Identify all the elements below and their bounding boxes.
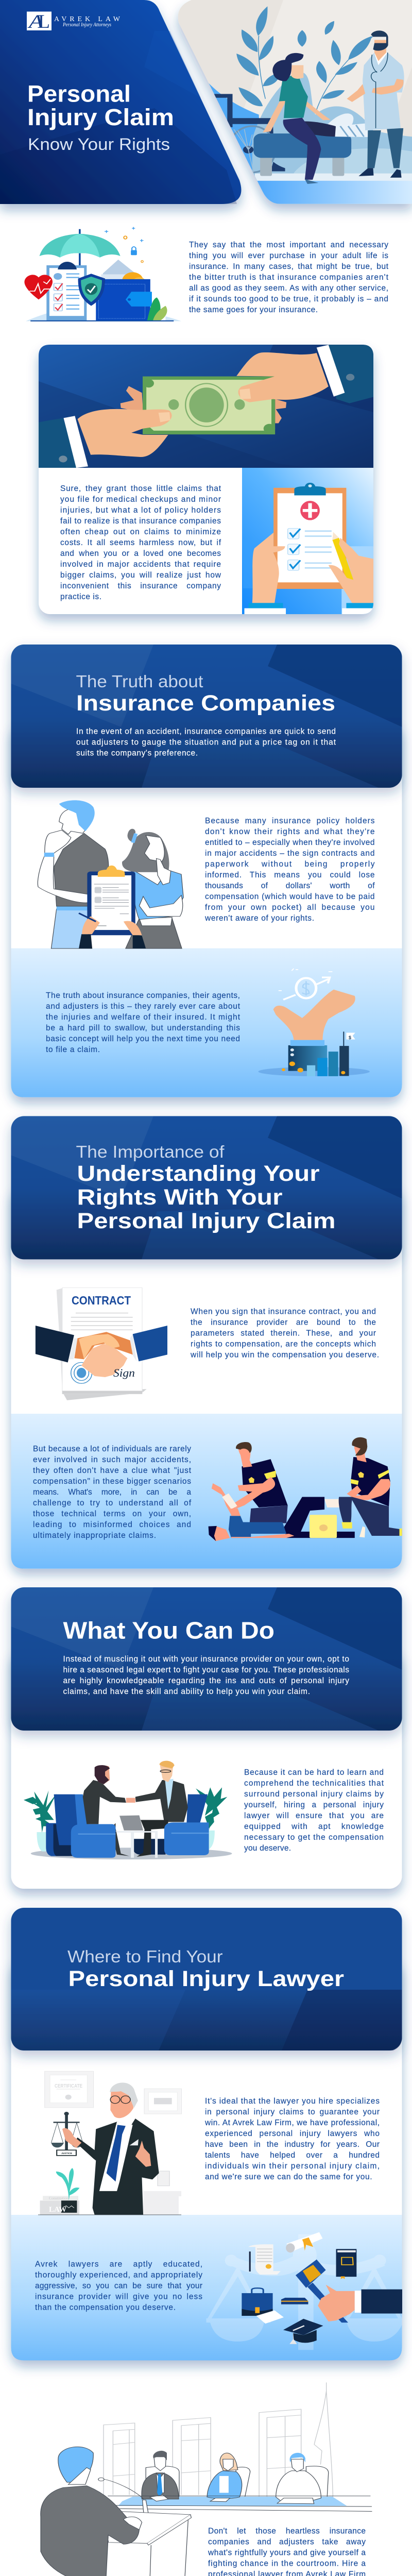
text block bbox=[204, 2097, 380, 2181]
illustration: paramedics treating a patient bbox=[209, 1437, 402, 1541]
text block: rights to compensation, are the concepts which bbox=[191, 1340, 376, 1349]
hero left panel bbox=[0, 0, 241, 204]
section header: What You Can Do bbox=[63, 1617, 274, 1643]
text block on light panel: compensation" in these bigger scenarios bbox=[33, 1477, 191, 1486]
section header: Insurance Companies bbox=[76, 691, 335, 716]
illustration: lawyer holding scales of justice: LAW bbox=[49, 2206, 66, 2214]
panel: where to find your personal injury lawyer bbox=[11, 1908, 402, 2361]
text block: compensation (which would have to be paid bbox=[205, 892, 375, 901]
section header: Where to Find Your bbox=[67, 1947, 223, 1966]
card text: Sure, they grant those little claims that bbox=[60, 484, 221, 493]
text block: When you sign that insurance contract, you and bbox=[191, 1308, 376, 1316]
text block: informed. This means you could lose bbox=[205, 871, 375, 879]
text block: equipped with apt knowledge bbox=[244, 1822, 384, 1831]
title: Know Your Rights bbox=[28, 135, 170, 154]
logo: AVREK LAW bbox=[54, 15, 121, 23]
illustration: lawyer and client shaking hands bbox=[24, 1761, 232, 1859]
text block: necessary to get the compensation bbox=[244, 1833, 384, 1842]
text block: fighting chance in the courtroom. Hire a bbox=[208, 2560, 366, 2568]
panel: the truth about insurance companies: $ bbox=[349, 1035, 351, 1040]
illustration: lawyer holding scales of justice bbox=[38, 2071, 182, 2215]
logo bbox=[27, 11, 121, 32]
section header: The Truth about bbox=[76, 672, 203, 691]
text block on light panel bbox=[35, 2260, 202, 2312]
text block: you deserve. bbox=[244, 1844, 291, 1853]
hero banner bbox=[0, 0, 412, 204]
text block on light panel: than the compensation you deserve. bbox=[35, 2303, 176, 2312]
illustration: courtroom panel and speaker bbox=[41, 2382, 372, 2576]
text block on light panel: means. What's more, in can be a bbox=[33, 1488, 191, 1497]
illustration: lawyer holding scales of justice: CERTIFICATE bbox=[55, 2083, 82, 2089]
text block: the insurance provider are bound to the bbox=[191, 1318, 376, 1327]
text block on light panel: thoroughly experienced, and appropriately bbox=[35, 2271, 202, 2280]
icon: insurance umbrella, clipboard, heart, shield and wallet bbox=[24, 227, 181, 321]
text block: experienced personal injury lawyers who bbox=[205, 2129, 380, 2138]
card text: bigger claims, you will realize just how bbox=[60, 571, 221, 580]
section header: Personal Injury Claim bbox=[77, 1209, 336, 1233]
logo: Personal Injury Attorneys bbox=[62, 22, 111, 28]
text block on light panel: those technical terms on your own, bbox=[33, 1510, 191, 1518]
text block: lawyer will ensure that you are bbox=[244, 1811, 384, 1820]
text block: in personal injury claims to guarantee your bbox=[205, 2108, 380, 2116]
illustration: lawyer holding scales of justice: JUSTICE bbox=[61, 2152, 72, 2155]
hero illustration: patient and doctor bbox=[178, 0, 412, 204]
illustration: medical checklist bbox=[242, 468, 373, 616]
logo: L bbox=[38, 11, 50, 32]
text block: from your own pocket) all because you bbox=[205, 903, 375, 912]
section header: Instead of muscling it out with your insurance provider on your own, opt to bbox=[63, 1655, 349, 1664]
section header bbox=[11, 645, 402, 788]
illustration: hand with coin and growing bars bbox=[259, 969, 370, 1076]
text block: weren't aware of your rights. bbox=[204, 914, 314, 923]
title: Personal bbox=[27, 80, 131, 107]
text block: don't know their rights and what they're bbox=[205, 827, 375, 836]
text block: entitled to – especially when they're involved bbox=[205, 838, 375, 847]
panel: the importance of understanding your rights bbox=[11, 1116, 402, 1569]
section header: suits the company's preference. bbox=[76, 749, 198, 757]
text block: win. At Avrek Law Firm, we have professional, bbox=[204, 2119, 380, 2127]
logo: A bbox=[27, 11, 43, 32]
text block on light panel: aggressive, so you can be sure that your bbox=[35, 2282, 202, 2291]
illustration: money changing hands bbox=[39, 345, 373, 468]
intro section bbox=[24, 227, 389, 321]
intro text: the bitter truth is that insurance companies aren't bbox=[189, 273, 389, 282]
text block: thousands of dollars' worth of bbox=[205, 882, 375, 890]
text block: surround personal injury claims by bbox=[244, 1790, 384, 1799]
illustration: contract and handshake: Sign bbox=[113, 1366, 135, 1379]
text block: parameters stated therein. These, and your bbox=[191, 1329, 376, 1338]
intro text: if it sounds too good to be true, it probably is – and bbox=[189, 295, 388, 303]
text block on light panel bbox=[46, 991, 241, 1054]
illustration: legal icons with gavel bbox=[207, 2232, 402, 2350]
illustration: man and woman reading a contract bbox=[38, 800, 183, 948]
section header: The Importance of bbox=[76, 1142, 225, 1161]
text block on light panel: ever involved in such major accidents, bbox=[33, 1455, 191, 1464]
card text: and when you or a loved one becomes bbox=[60, 549, 221, 558]
text block on light panel: and adjusters is this – they rarely ever care about bbox=[46, 1002, 241, 1011]
title bbox=[27, 80, 174, 154]
closing section: courtroom bbox=[41, 2382, 372, 2576]
card text: you file for medical checkups and minor bbox=[60, 495, 221, 504]
intro text: the same goes for your insurance. bbox=[189, 306, 318, 314]
text block on light panel: But because a lot of individuals are rarely bbox=[33, 1445, 191, 1453]
text block: talents have helped over a hundred bbox=[205, 2151, 380, 2160]
text block: what's rightfully yours and give yourself a bbox=[208, 2549, 366, 2557]
text block: have been in the industry for years. Our bbox=[205, 2140, 380, 2149]
text block: will help you win the compensation you deserve. bbox=[190, 1351, 379, 1360]
text block on light panel: ultimately inappropriate claims. bbox=[33, 1531, 156, 1540]
text block on light panel: they often don't have a clue what "just bbox=[33, 1466, 192, 1475]
intro text: They say that the most important and necessary bbox=[189, 241, 388, 249]
text block on light panel: to file a claim. bbox=[46, 1045, 100, 1054]
text block: It's ideal that the lawyer you hire specializes bbox=[205, 2097, 380, 2106]
card text: practice is. bbox=[60, 592, 101, 601]
title: Injury Claim bbox=[27, 104, 174, 130]
section header: are highly knowledgeable regarding the ins and outs of personal injury bbox=[63, 1676, 349, 1685]
treatment bench bbox=[260, 157, 272, 176]
section header: hire a seasoned legal expert to fight your case for you. These professionals bbox=[63, 1666, 349, 1674]
text block: and we're sure we can do the same for you. bbox=[205, 2173, 372, 2181]
text block: in major accidents – the sign contracts and bbox=[205, 849, 375, 858]
text block: Because many insurance policy holders bbox=[205, 817, 375, 825]
illustration: contract and handshake bbox=[36, 1288, 167, 1400]
section header: Personal Injury Lawyer bbox=[68, 1967, 344, 1991]
section header bbox=[11, 1587, 402, 1731]
woman bbox=[305, 122, 336, 137]
text block bbox=[244, 1768, 384, 1853]
doctor bbox=[367, 130, 381, 168]
text block on light panel: the injuries and welfare of their insured. It might bbox=[46, 1013, 241, 1022]
text block: comprehend the technicalities that bbox=[244, 1779, 384, 1788]
illustration: contract and handshake: CONTRACT bbox=[72, 1294, 131, 1307]
intro text: insurance. In many cases, that might be true, but bbox=[189, 262, 389, 271]
text block: individuals win their personal injury claim, bbox=[205, 2162, 380, 2171]
panel: the truth about insurance companies bbox=[11, 645, 402, 1097]
section header: In the event of an accident, insurance companies are quick to send bbox=[76, 727, 336, 736]
card text: involved in major accidents that require bbox=[60, 560, 221, 569]
card text: costs. It all seems harmless now, but if bbox=[60, 538, 221, 547]
text block on light panel bbox=[33, 1445, 192, 1540]
section header: out adjusters to gauge the situation and put a price tag on it that bbox=[76, 738, 336, 747]
text block on light panel: insurance provider will give you no less bbox=[35, 2293, 202, 2301]
illustration: lawyer holding scales of justice: Constitution bbox=[49, 2196, 69, 2200]
text block: companies and adjusters take away bbox=[208, 2538, 366, 2547]
card text: inconvenient this insurance company bbox=[60, 582, 221, 590]
text block on light panel: challenge to try to understand all of bbox=[33, 1499, 192, 1507]
text block bbox=[204, 817, 375, 923]
plants bbox=[236, 6, 373, 113]
card text bbox=[60, 484, 221, 601]
text block on light panel: basic concept will help you the next time you need bbox=[46, 1035, 240, 1043]
section header bbox=[11, 1908, 402, 2050]
section header: claims, and have the skill and ability to help you win your claim. bbox=[63, 1687, 310, 1696]
card text: often cheap out on claims to minimize bbox=[60, 528, 221, 536]
section header: Rights With Your bbox=[77, 1185, 283, 1210]
card: claims and cheap-outs bbox=[39, 345, 373, 616]
card text: fail to realize is that insurance companies bbox=[60, 517, 221, 526]
text block on light panel: The truth about insurance companies, their agents, bbox=[46, 991, 240, 1000]
text block: paperwork without being properly bbox=[205, 860, 375, 869]
text block on light panel: leading to misinformed choices and bbox=[33, 1520, 191, 1529]
intro text: thing you will ever purchase in your adult life is bbox=[189, 251, 388, 260]
intro text bbox=[189, 241, 389, 314]
section header: Understanding Your bbox=[77, 1161, 320, 1186]
panel: what you can do bbox=[11, 1587, 402, 1889]
intro text: all as good as they seem. As with any other service, bbox=[189, 284, 388, 293]
text block on light panel: Avrek lawyers are aptly educated, bbox=[35, 2260, 202, 2269]
text block on light panel: be a hard pill to swallow, but understanding this bbox=[46, 1024, 240, 1032]
text block bbox=[190, 1308, 379, 1360]
card text: injuries, but what a lot of policy holders bbox=[60, 506, 221, 515]
text block bbox=[208, 2527, 366, 2576]
section header bbox=[11, 1116, 402, 1259]
wheelchair bbox=[214, 94, 285, 173]
text block: yourself, hiring a personal injury bbox=[244, 1801, 384, 1809]
text block: Don't let those heartless insurance bbox=[208, 2527, 366, 2536]
text block: Because it can be hard to learn and bbox=[244, 1768, 384, 1777]
